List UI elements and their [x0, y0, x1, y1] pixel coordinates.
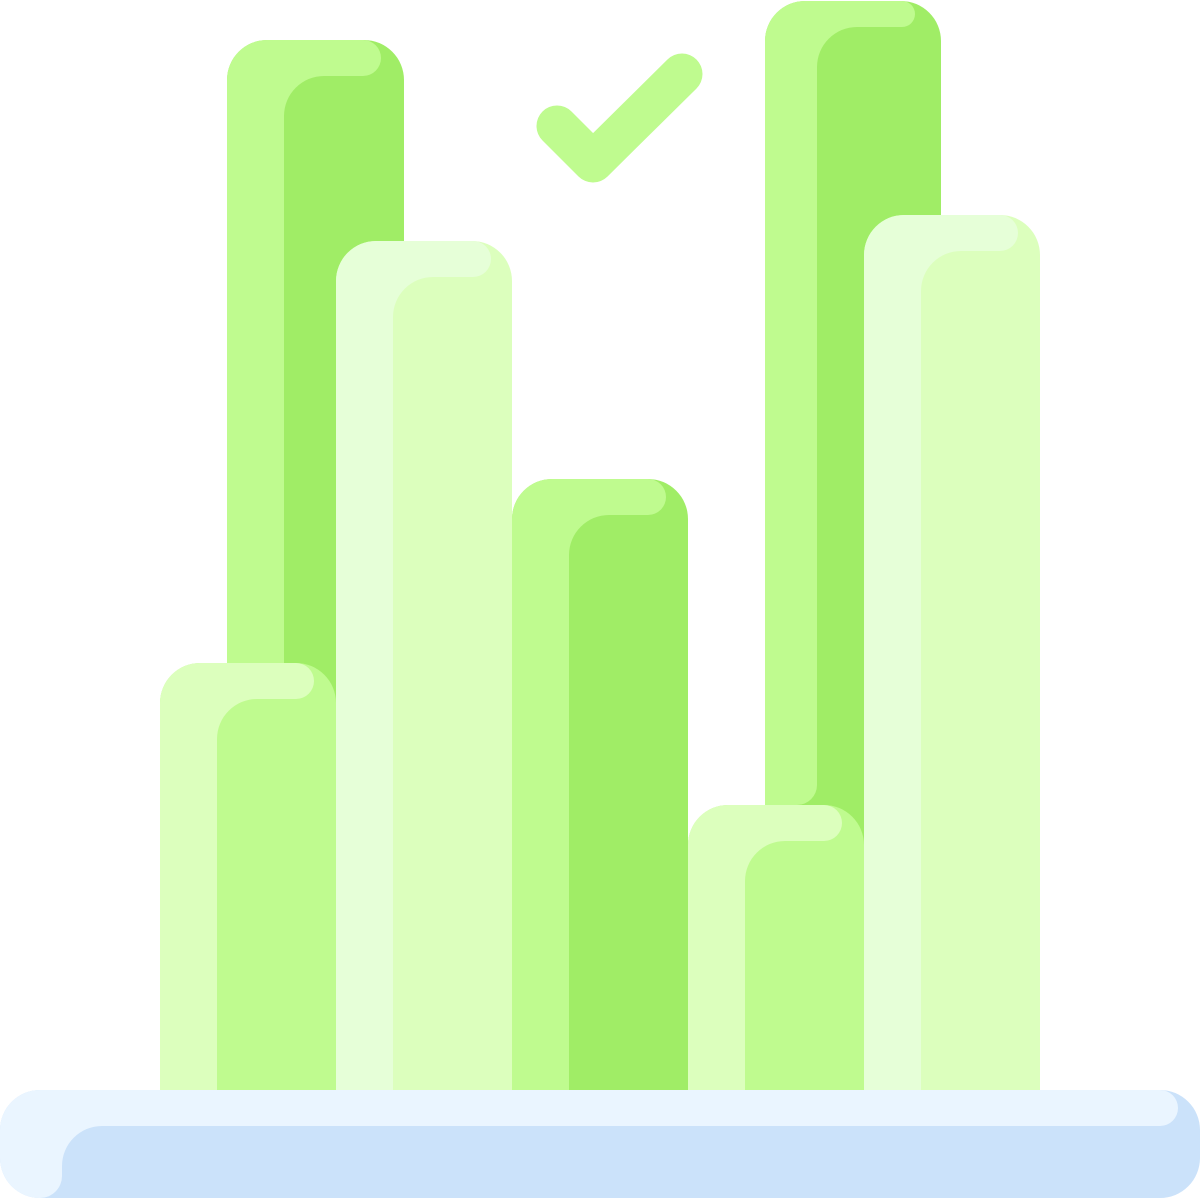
bar: centre medium green [512, 479, 688, 1090]
bar: pale tall second [336, 241, 512, 1090]
bar: front right short [688, 805, 864, 1090]
bar: back right tallest green [765, 1, 941, 1090]
bar: back left tall green [227, 40, 404, 1090]
bar: front left short [160, 663, 336, 1090]
base platform [0, 1090, 1200, 1198]
icon: check mark [557, 74, 682, 162]
bar: pale tall far right [864, 215, 1040, 1090]
